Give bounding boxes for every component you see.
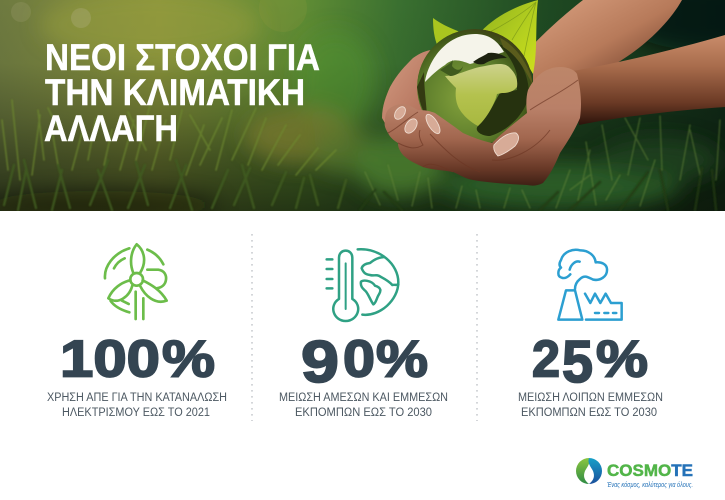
finger creases: [388, 80, 578, 172]
divider left: [251, 234, 253, 421]
title: ΤΗΝ ΚΛΙΜΑΤΙΚΗ: [45, 72, 305, 113]
tagline: Ένας κόσμος, καλύτερος για όλους.: [607, 481, 693, 489]
divider right: [476, 234, 478, 421]
caption: direct and indirect emissions: [279, 392, 448, 419]
stat: 100%: %: [162, 330, 215, 388]
stat: 25%: [532, 329, 648, 395]
panel: renewable energy: [47, 244, 227, 419]
stat: 25%: %: [596, 330, 648, 388]
stat: 100%: [60, 330, 215, 388]
fingernails: [392, 105, 519, 156]
leaf small: [433, 18, 458, 44]
caption: direct and indirect emissions: ΕΚΠΟΜΠΩΝ ΕΩΣ ΤΟ 2030: [295, 407, 432, 419]
upper arm: [533, 0, 682, 83]
lower arm: [573, 35, 725, 125]
stat: 90%: 0: [343, 330, 375, 388]
icon: thermometer and earth: [327, 249, 398, 321]
logo: COSMOTE: [576, 458, 693, 489]
stat: 90%: [301, 329, 428, 395]
icon: wind turbine: [105, 244, 167, 319]
stat: 25%: 2: [532, 330, 560, 388]
caption: renewable energy: ΗΛΕΚΤΡΙΣΜΟΥ ΕΩΣ ΤΟ 2021: [62, 407, 210, 419]
wordmark: COSMOTE: [607, 461, 693, 480]
title: [44, 37, 320, 149]
caption: other indirect emissions: [518, 392, 663, 419]
stat: 90%: %: [376, 330, 428, 388]
panel: other indirect emissions: [518, 250, 663, 419]
left hand behind globe: [382, 50, 430, 123]
right cupped hand with fingers: [385, 67, 581, 186]
title: ΝΕΟΙ ΣΤΟΧΟΙ ΓΙΑ: [45, 37, 320, 78]
caption: other indirect emissions: ΕΚΠΟΜΠΩΝ ΕΩΣ ΤΟ 2030: [521, 407, 657, 419]
caption: renewable energy: ΧΡΗΣΗ ΑΠΕ ΓΙΑ ΤΗΝ ΚΑΤΑΝΑΛΩΣΗ: [47, 392, 227, 404]
stat: 90%: 9: [301, 329, 339, 395]
glass globe: [417, 29, 533, 145]
caption: renewable energy: [47, 392, 227, 419]
caption: other indirect emissions: ΜΕΙΩΣΗ ΛΟΙΠΩΝ ΕΜΜΕΣΩΝ: [518, 392, 663, 404]
icon: logo mark: [576, 458, 602, 484]
hero photo: hands holding glass globe over grass: [0, 0, 725, 219]
icon: factory and smoke cloud: [558, 250, 622, 320]
leaf large: [478, 0, 538, 74]
stat: 100%: 100: [60, 330, 160, 388]
title: ΑΛΛΑΓΗ: [44, 108, 178, 149]
panel: direct and indirect emissions: [279, 249, 448, 419]
grass blades: [2, 100, 720, 210]
caption: direct and indirect emissions: ΜΕΙΩΣΗ ΑΜΕΣΩΝ ΚΑΙ ΕΜΜΕΣΩΝ: [279, 392, 448, 404]
stat: 25%: 5: [562, 329, 593, 395]
